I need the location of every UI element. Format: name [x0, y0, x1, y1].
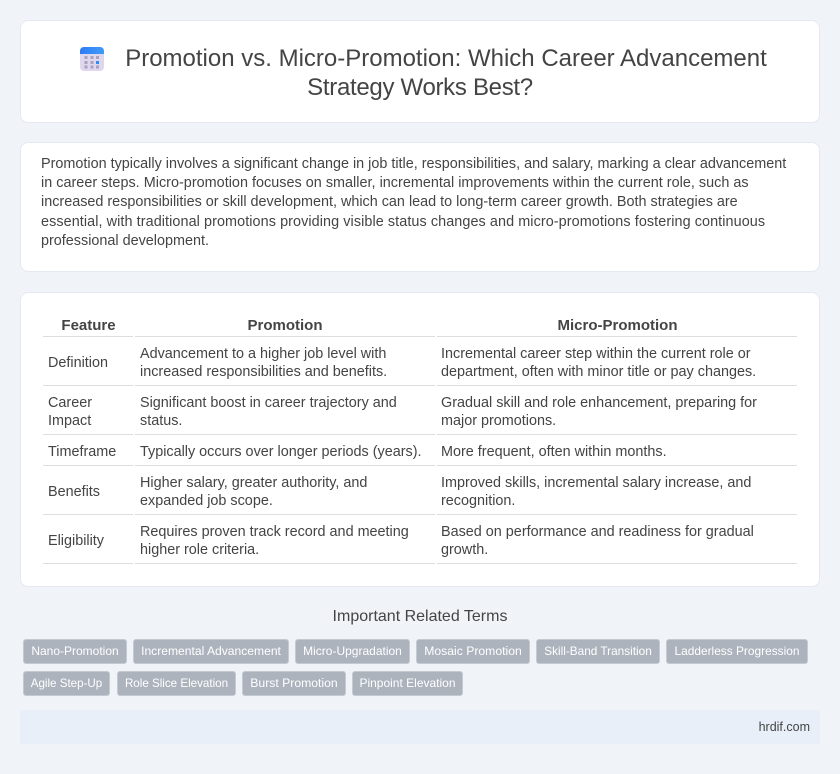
row: benefits: recognition.: [441, 493, 515, 509]
row: eligibility: [48, 524, 754, 558]
intro paragraph card: [20, 142, 820, 272]
intro text: increased responsibilities or skill development, which can lead to long-term career growth. Both strategies are: [41, 194, 738, 210]
related terms tags: Pinpoint Elevation: [359, 676, 456, 690]
row: eligibility: Eligibility: [48, 533, 104, 549]
related terms tags: Incremental Advancement: [141, 644, 281, 658]
row: timeframe: [48, 444, 667, 460]
row: eligibility: Requires proven track record and meeting: [140, 524, 409, 540]
row: definition: [48, 346, 756, 380]
row: definition: department, often with minor title or pay changes.: [441, 364, 756, 380]
footer source: hrdif.com: [759, 720, 810, 734]
row: career impact: Career: [48, 395, 92, 411]
footer bar: [20, 710, 820, 744]
row: benefits: expanded job scope.: [140, 493, 273, 509]
row: definition: Advancement to a higher job level with: [140, 346, 386, 362]
title: [125, 45, 767, 101]
row: career impact: Impact: [48, 413, 91, 429]
intro text: essential, with traditional promotions providing visible status changes and micro-promotions fostering continuous: [41, 214, 765, 230]
related terms tags: Burst Promotion: [250, 676, 338, 690]
comparison table card: [20, 292, 820, 587]
row: definition: increased responsibilities and benefits.: [140, 364, 387, 380]
header card: [20, 20, 820, 123]
intro text: Promotion typically involves a significant change in job title, responsibilities, and salary, marking a clear advancement: [41, 156, 786, 172]
icon: calendar: [80, 47, 104, 71]
row: timeframe: More frequent, often within months.: [441, 444, 667, 460]
row: benefits: Higher salary, greater authority, and: [140, 475, 367, 491]
row: timeframe: Typically occurs over longer periods (years).: [140, 444, 422, 460]
table header: [61, 317, 678, 334]
title: Strategy Works Best?: [307, 74, 533, 101]
row: career impact: status.: [140, 413, 182, 429]
related terms tags: Ladderless Progression: [675, 644, 799, 658]
row: benefits: Benefits: [48, 484, 100, 500]
row: career impact: Significant boost in career trajectory and: [140, 395, 397, 411]
title: Promotion vs. Micro-Promotion: Which Career Advancement: [125, 45, 767, 72]
related terms tags: Micro-Upgradation: [303, 644, 402, 658]
related terms tags: Role Slice Elevation: [125, 677, 228, 690]
row: timeframe: Timeframe: [48, 444, 116, 460]
related terms tags: [23, 639, 808, 696]
related terms tags: Agile Step-Up: [31, 677, 102, 690]
row: career impact: [48, 395, 757, 429]
row: definition: Definition: [48, 355, 108, 371]
row: career impact: Gradual skill and role enhancement, preparing for: [441, 395, 757, 411]
intro text: [41, 156, 786, 249]
row: definition: Incremental career step within the current role or: [441, 346, 751, 362]
row: benefits: [48, 475, 751, 509]
table header: Promotion: [248, 317, 322, 334]
row: benefits: Improved skills, incremental salary increase, and: [441, 475, 751, 491]
related terms heading: Important Related Terms: [333, 608, 507, 625]
row: eligibility: higher role criteria.: [140, 542, 259, 558]
table header: Feature: [61, 317, 116, 334]
table header: Micro-Promotion: [558, 317, 678, 334]
related terms tags: Skill-Band Transition: [544, 644, 652, 658]
related terms tags: Mosaic Promotion: [424, 644, 522, 658]
row: eligibility: Based on performance and readiness for gradual: [441, 524, 754, 540]
row: eligibility: growth.: [441, 542, 488, 558]
intro text: professional development.: [41, 233, 209, 249]
intro text: in career steps. Micro-promotion focuses on smaller, incremental improvements within the current role, such as: [41, 175, 749, 191]
row: career impact: major promotions.: [441, 413, 556, 429]
related terms tags: Nano-Promotion: [31, 644, 119, 658]
